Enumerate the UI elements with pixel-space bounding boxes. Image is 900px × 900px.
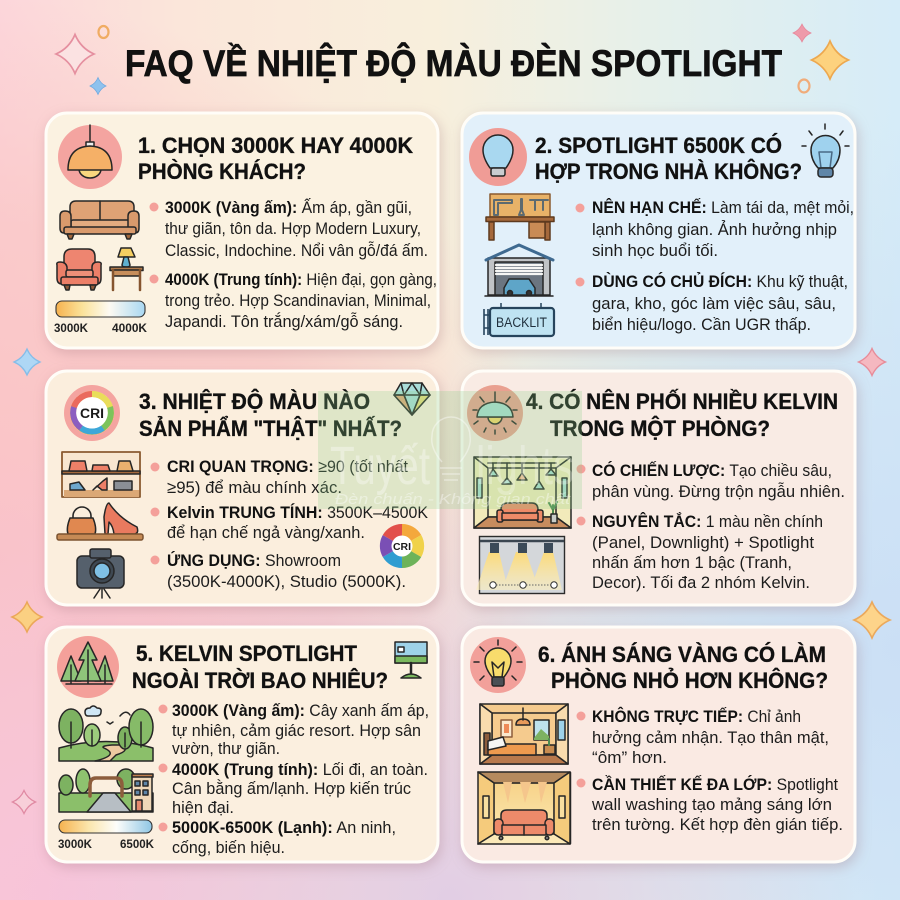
icon: workbench xyxy=(486,194,554,240)
gradient bar: 3000K to 6500K: 6500K xyxy=(120,839,155,851)
icon: billboard xyxy=(395,642,427,678)
text block: answers 3: ≥95) để màu chính xác. xyxy=(167,478,342,497)
text block: answers 1: thư giãn, tôn da. Hợp Modern Luxury, xyxy=(165,219,421,238)
text block: answers 3: để hạn chế ngả vàng/xanh. xyxy=(167,523,365,542)
heading 3: SẢN PHẨM "THẬT" NHẤT? xyxy=(139,416,402,441)
icon: side table with lamp xyxy=(110,248,143,290)
heading 4 xyxy=(526,388,838,441)
illustration: warm bedroom xyxy=(480,704,568,764)
heading 5: NGOÀI TRỜI BAO NHIÊU? xyxy=(132,668,388,693)
illustration: room with pendant lights xyxy=(474,457,571,528)
illustration: spotlights on a track xyxy=(476,536,564,594)
text block: answers 2: biển hiệu/logo. Cần UGR thấp. xyxy=(592,315,811,334)
text block: answers 5: tự nhiên, cảm giác resort. Hợp sân xyxy=(172,721,421,740)
icon: diamond xyxy=(394,383,430,415)
heading 3: 3. NHIỆT ĐỘ MÀU NÀO xyxy=(139,389,370,414)
text block: answers 5: vườn, thư giãn. xyxy=(172,739,280,758)
icon: armchair xyxy=(57,249,101,290)
heading 2: 2. SPOTLIGHT 6500K CÓ xyxy=(535,133,782,158)
heading 6: 6. ÁNH SÁNG VÀNG CÓ LÀM xyxy=(538,642,826,667)
text block: answers 6: trên tường. Kết hợp đèn gián tiếp. xyxy=(592,815,843,834)
text block: answers 3: Kelvin TRUNG TÍNH: 3500K–4500K xyxy=(167,503,429,522)
icon: backlit sign xyxy=(484,303,554,336)
watermark: Tuyết xyxy=(330,436,430,496)
heading 6: PHÒNG NHỎ HƠN KHÔNG? xyxy=(551,668,828,693)
text block: answers 5: hiện đại. xyxy=(172,798,234,817)
illustration: wall washing living room xyxy=(478,772,570,844)
panel: question 1 xyxy=(46,113,438,348)
panel: question 4 xyxy=(462,371,855,605)
heading 3 xyxy=(139,389,402,441)
icon: backlit sign: BACKLIT xyxy=(496,315,547,330)
icon: camera on tripod xyxy=(77,549,124,598)
text block: answers 6 xyxy=(576,707,843,834)
text block: answers 2 xyxy=(576,198,854,334)
text block: answers 2: gara, kho, góc làm việc sâu, sâu, xyxy=(592,294,836,313)
text block: answers 6: KHÔNG TRỰC TIẾP: Chỉ ảnh xyxy=(592,707,801,726)
text block: answers 1: 4000K (Trung tính): Hiện đại, gọn gàng, xyxy=(165,270,437,289)
text block: answers 5: cống, biến hiệu. xyxy=(172,838,285,857)
heading 1: PHÒNG KHÁCH? xyxy=(138,159,306,184)
text block: answers 3: (3500K-4000K), Studio (5000K). xyxy=(167,572,406,591)
text block: answers 2: lạnh không gian. Ảnh hưởng nhịp xyxy=(592,220,837,239)
text block: answers 5 xyxy=(158,701,429,857)
text block: answers 4: nhấn ấm hơn 1 bậc (Tranh, xyxy=(592,553,792,572)
icon: light bulb in circle xyxy=(469,128,527,186)
text block: answers 1: Japandi. Tôn trắng/xám/gỗ sáng. xyxy=(165,312,403,331)
text block: answers 4: phân vùng. Đừng trộn ngẫu nhiên. xyxy=(592,482,845,501)
heading 2 xyxy=(535,133,802,184)
heading 1: 1. CHỌN 3000K HAY 4000K xyxy=(138,133,414,158)
icon: pine trees xyxy=(57,636,119,698)
text block: answers 4: (Panel, Downlight) + Spotlight xyxy=(592,533,814,552)
text block: answers 5: 5000K-6500K (Lạnh): An ninh, xyxy=(172,818,396,837)
watermark: Đèn chuẩn - Không gian chất xyxy=(335,491,571,508)
icon: product shelf xyxy=(62,452,140,497)
text block: answers 3: ỨNG DỤNG: Showroom xyxy=(167,551,341,570)
panel: question 6 xyxy=(462,627,855,862)
gradient bar: 3000K to 4000K: 3000K xyxy=(54,323,89,335)
text block: answers 4: NGUYÊN TẮC: 1 màu nền chính xyxy=(592,512,823,531)
text block: answers 4: CÓ CHIẾN LƯỢC: Tạo chiều sâu, xyxy=(592,461,832,480)
text block: answers 1: 3000K (Vàng ấm): Ấm áp, gần gũi, xyxy=(165,198,412,217)
icon: garage with car xyxy=(485,245,553,296)
heading 4: TRONG MỘT PHÒNG? xyxy=(550,416,770,441)
icon: pendant lamp xyxy=(58,125,122,189)
panel: question 5 xyxy=(46,627,438,862)
text block: answers 2: NÊN HẠN CHẾ: Làm tái da, mệt mỏi, xyxy=(592,198,854,217)
text block: answers 4 xyxy=(576,461,845,592)
icon: handbag and heels xyxy=(57,503,143,540)
icon: yellow bulb with rays xyxy=(470,637,526,693)
gradient bar: 3000K to 6500K: 3000K xyxy=(58,839,93,851)
icon: CRI badge: CRI xyxy=(80,406,104,421)
heading 6 xyxy=(538,642,828,693)
icon: lamp with rays xyxy=(467,385,523,441)
title: FAQ VỀ NHIỆT ĐỘ MÀU ĐÈN SPOTLIGHT xyxy=(125,42,782,84)
text block: answers 1: trong trẻo. Hợp Scandinavian, Minimal, xyxy=(165,291,431,310)
panel: question 2 xyxy=(462,113,855,348)
text block: answers 6: wall washing tạo mảng sáng lớn xyxy=(591,795,832,814)
gradient bar: 3000K to 6500K xyxy=(58,820,155,851)
text block: answers 1: Classic, Indochine. Nổi vân gỗ/đá ấm. xyxy=(165,241,428,260)
icon: sofa xyxy=(60,201,139,239)
illustration: park with trees xyxy=(59,706,153,761)
text block: answers 5: Cân bằng ấm/lạnh. Hợp kiến trúc xyxy=(172,779,411,798)
watermark xyxy=(318,391,582,509)
text block: answers 2: DÙNG CÓ CHỦ ĐÍCH: Khu kỹ thuật, xyxy=(592,272,848,291)
panel: question 3 xyxy=(46,371,438,605)
text block: answers 6: CẦN THIẾT KẾ ĐA LỚP: Spotlight xyxy=(592,775,838,794)
text block: answers 2: sinh học buổi tối. xyxy=(592,241,718,260)
heading 4: 4. CÓ NÊN PHỐI NHIỀU KELVIN xyxy=(526,388,838,414)
icon: glowing blue bulb xyxy=(802,124,849,177)
gradient bar: 3000K to 4000K: 4000K xyxy=(112,323,148,335)
heading 1 xyxy=(138,133,414,184)
heading 5: 5. KELVIN SPOTLIGHT xyxy=(136,641,357,666)
heading 5 xyxy=(132,641,388,693)
icon: CRI colour wheel: CRI xyxy=(393,541,411,553)
text block: answers 1 xyxy=(150,198,437,331)
text block: answers 5: 3000K (Vàng ấm): Cây xanh ấm áp, xyxy=(172,701,429,720)
text block: answers 3: CRI QUAN TRỌNG: ≥90 (tốt nhất xyxy=(167,457,408,476)
heading 2: HỢP TRONG NHÀ KHÔNG? xyxy=(535,159,802,184)
text block: answers 6: hưởng cảm nhận. Tạo thân mật, xyxy=(592,728,829,747)
illustration: path and building xyxy=(59,769,153,812)
text block: answers 4: Decor). Tối đa 2 nhóm Kelvin. xyxy=(592,573,810,592)
icon: CRI colour wheel xyxy=(386,530,418,562)
text block: answers 3 xyxy=(150,457,429,591)
text block: answers 5: 4000K (Trung tính): Lối đi, an toàn. xyxy=(172,760,428,779)
watermark: lights xyxy=(476,436,574,496)
icon: CRI badge xyxy=(64,385,120,441)
text block: answers 6: “ôm” hơn. xyxy=(592,748,667,767)
gradient bar: 3000K to 4000K xyxy=(54,301,148,335)
